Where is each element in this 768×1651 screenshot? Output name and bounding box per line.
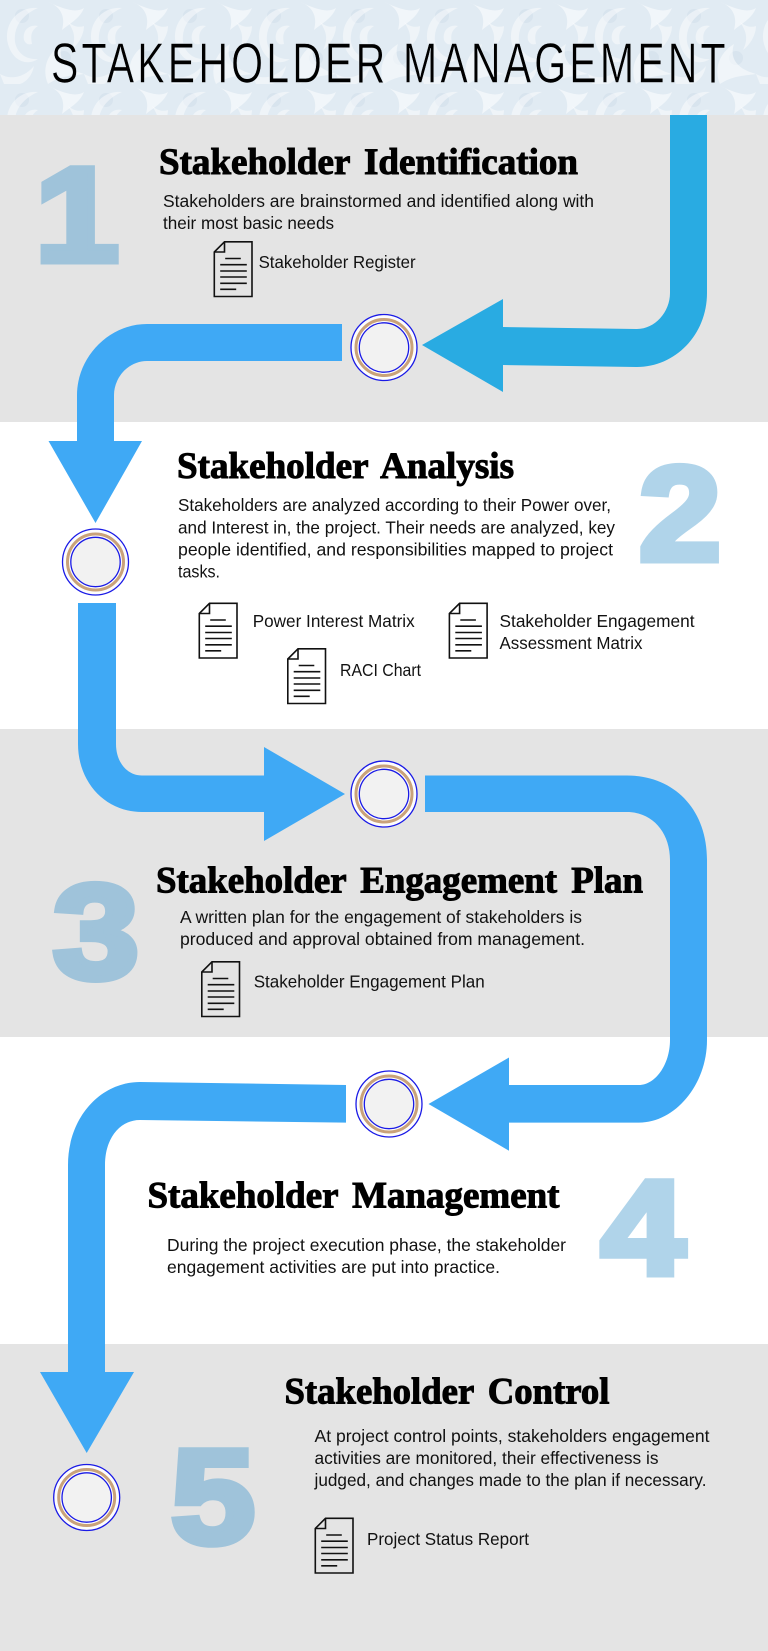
description <box>180 907 585 949</box>
document label <box>500 611 695 653</box>
icon: document power interest <box>199 603 237 658</box>
heading: Stakeholder Analysis <box>177 446 514 487</box>
panel: stakeholder engagement plan <box>0 729 768 1037</box>
title: STAKEHOLDER MANAGEMENT <box>51 31 726 95</box>
heading: Stakeholder Engagement Plan <box>156 860 643 902</box>
arrow: step 4 node to step 5 node <box>40 1082 346 1453</box>
number 3: 3 <box>53 858 139 1007</box>
document label: Stakeholder Engagement Plan <box>254 972 485 992</box>
description: activities are monitored, their effectiveness is <box>314 1448 659 1468</box>
document label: Assessment Matrix <box>500 633 643 653</box>
description: and Interest in, the project. Their needs are analyzed, key <box>178 518 615 538</box>
heading: Stakeholder Management <box>148 1176 560 1216</box>
document label: Power Interest Matrix <box>253 611 415 631</box>
icon: document engagement assessment <box>449 603 487 658</box>
description: At project control points, stakeholders engagement <box>314 1426 710 1446</box>
arrow: step 1 node to step 2 node <box>48 324 342 523</box>
description: During the project execution phase, the stakeholder <box>167 1235 566 1255</box>
description: judged, and changes made to the plan if necessary. <box>314 1470 706 1490</box>
header banner <box>0 0 768 115</box>
icon: document <box>202 962 240 1016</box>
description <box>314 1426 710 1490</box>
panel: stakeholder identification <box>0 115 768 422</box>
number 5: 5 <box>171 1423 255 1572</box>
node: step 3 <box>351 761 417 827</box>
panel: stakeholder management <box>0 1037 768 1344</box>
icon: document <box>315 1518 353 1573</box>
description <box>178 495 615 582</box>
panel: stakeholder control <box>0 1344 768 1651</box>
panel: stakeholder analysis <box>0 422 768 729</box>
node: step 4 <box>356 1071 422 1137</box>
description: people identified, and responsibilities mapped to project <box>178 540 613 560</box>
arrow: step 3 node to step 4 node <box>425 776 707 1151</box>
arrow: start to step 1 node <box>422 115 707 392</box>
icon: document <box>214 242 252 296</box>
description: Stakeholders are brainstormed and identified along with <box>163 191 594 211</box>
node: step 1 <box>351 314 417 380</box>
document label: Project Status Report <box>367 1529 529 1549</box>
number 4: 4 <box>601 1154 685 1303</box>
heading: Stakeholder Control <box>284 1372 610 1412</box>
document label: Stakeholder Engagement <box>500 611 695 631</box>
description <box>167 1235 566 1277</box>
description: engagement activities are put into practice. <box>167 1257 500 1277</box>
document label: Stakeholder Register <box>259 252 416 272</box>
description <box>163 191 594 233</box>
document label: RACI Chart <box>340 660 421 680</box>
number 1: 1 <box>35 141 119 290</box>
number 2: 2 <box>639 440 721 589</box>
description: tasks. <box>178 562 220 582</box>
description: their most basic needs <box>163 213 334 233</box>
description: A written plan for the engagement of stakeholders is <box>180 907 582 927</box>
description: produced and approval obtained from management. <box>180 929 585 949</box>
node: step 5 <box>54 1464 120 1530</box>
arrow: step 2 node to step 3 node <box>78 603 345 841</box>
description: Stakeholders are analyzed according to their Power over, <box>178 495 611 515</box>
node: step 2 <box>62 529 128 595</box>
heading: Stakeholder Identification <box>159 142 578 183</box>
icon: document raci <box>288 649 326 704</box>
